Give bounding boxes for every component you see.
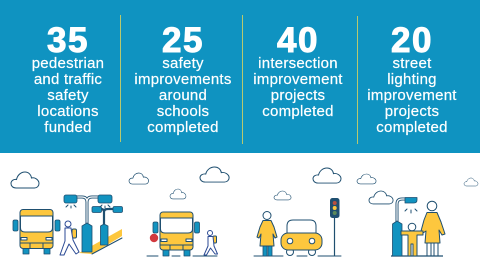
stat: 40 intersection projects: projects: [271, 87, 325, 104]
icon: walking person with backpack: [60, 221, 79, 255]
stat: 20 street lighting projects: 20: [391, 21, 433, 60]
stat: 25 school improvements: schools: [157, 103, 209, 120]
icon: street lights: [64, 195, 122, 252]
stat: 25 school improvements: completed: [147, 119, 219, 136]
icon: woman in yellow dress: [257, 212, 277, 256]
stat: 35 locations funded: and traffic: [34, 71, 102, 88]
stat: 20 street lighting projects: [367, 21, 457, 136]
stat: 35 locations funded: 35: [47, 21, 89, 60]
blue header band: [0, 0, 480, 153]
stat: 20 street lighting projects: projects: [385, 103, 439, 120]
icon: woman in yellow coat: [421, 201, 445, 256]
icon: child in yellow: [401, 223, 423, 256]
column dividers: [120, 15, 358, 144]
stat: 35 locations funded: locations: [37, 103, 99, 120]
stat: 35 locations funded: [32, 21, 104, 136]
stat: 25 school improvements: 25: [162, 21, 204, 60]
ground line: [391, 255, 443, 257]
stat: 20 street lighting projects: street: [392, 55, 432, 72]
stat: 25 school improvements: improvements: [134, 71, 232, 88]
stat: 40 intersection projects: improvement: [253, 71, 343, 88]
ground line: [147, 255, 217, 257]
illustration: street light with woman and child: [391, 198, 445, 256]
illustration: bus at school stop with pedestrian: [147, 212, 218, 256]
illustration: woman, car and traffic light: [254, 198, 341, 256]
stat: 40 intersection projects: completed: [262, 103, 334, 120]
ground line: [254, 255, 341, 257]
icon: red stop sign: [150, 234, 158, 242]
stat: 40 intersection projects: 40: [277, 21, 319, 60]
icon: front bus: [13, 210, 60, 254]
stat: 25 school improvements: safety: [162, 55, 204, 72]
stat: 35 locations funded: pedestrian: [32, 55, 104, 72]
stat: 25 school improvements: [134, 21, 232, 136]
icon: street light: [392, 198, 417, 256]
stat: 35 locations funded: safety: [47, 87, 89, 104]
illustration: bus with street lights and pedestrian: [13, 195, 122, 255]
icon: walking person: [204, 230, 218, 255]
stat: 20 street lighting projects: completed: [376, 119, 448, 136]
stat: 20 street lighting projects: lighting: [387, 71, 437, 88]
stat: 20 street lighting projects: improvement: [367, 87, 457, 104]
stat: 40 intersection projects: [253, 21, 343, 120]
icon: yellow car: [281, 220, 322, 256]
clouds: [11, 167, 478, 204]
icon: front bus: [153, 212, 200, 256]
stat: 40 intersection projects: intersection: [258, 55, 338, 72]
stat: 35 locations funded: funded: [44, 119, 92, 136]
icon: yellow road: [79, 229, 122, 254]
stat: 25 school improvements: around: [159, 87, 207, 104]
icon: traffic light: [330, 198, 340, 256]
